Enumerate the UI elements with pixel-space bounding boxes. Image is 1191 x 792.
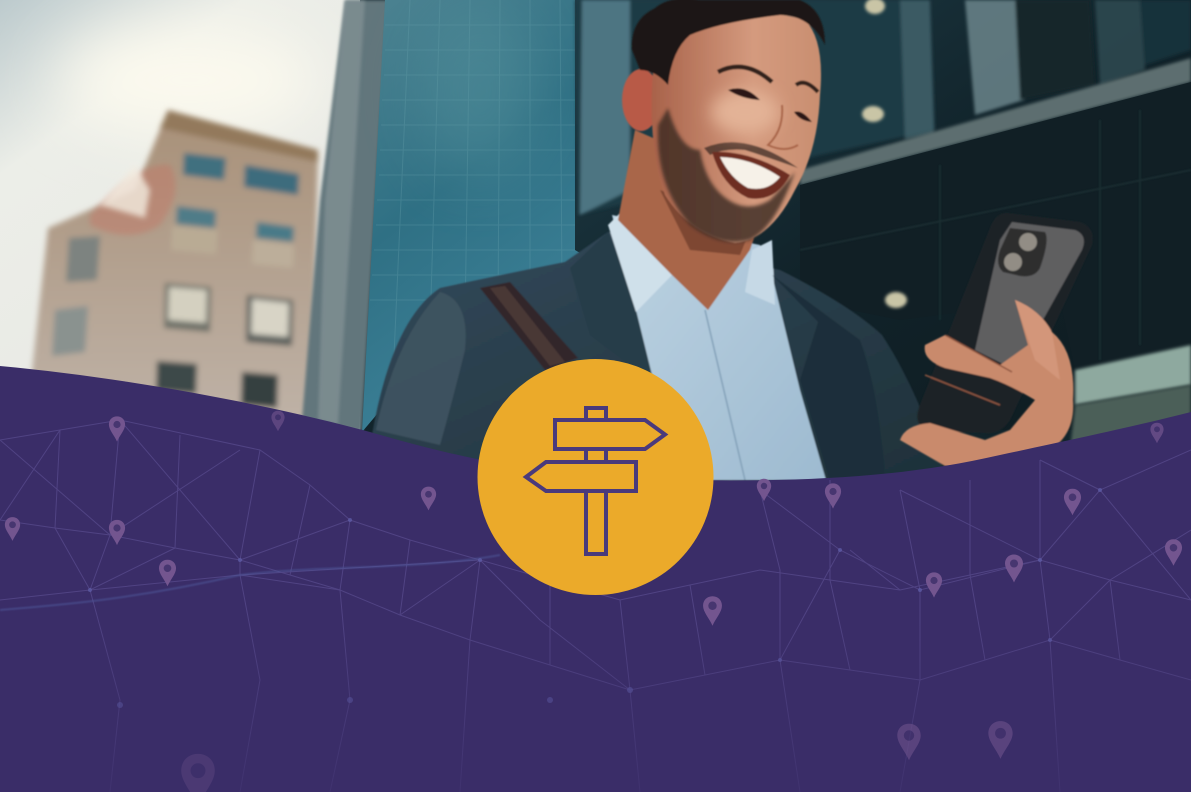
sun glow bbox=[60, 25, 320, 135]
brows bbox=[718, 67, 772, 82]
lower right ledge bbox=[1075, 345, 1191, 405]
smile bbox=[712, 152, 790, 199]
moustache bbox=[704, 142, 798, 168]
shirt bbox=[612, 215, 826, 480]
map pins bbox=[5, 411, 1182, 792]
beard stubble bbox=[658, 108, 795, 242]
hair bbox=[632, 0, 825, 85]
fade lower mesh bbox=[0, 610, 1191, 792]
mesh nodes bbox=[88, 418, 1102, 708]
left arrow sign bbox=[526, 462, 636, 491]
ear bbox=[622, 69, 660, 131]
purple wave panel with network map pattern bbox=[0, 366, 1191, 792]
lapels bbox=[571, 234, 616, 274]
post top bbox=[586, 408, 606, 420]
right lapel bbox=[772, 275, 885, 482]
background photo: businessman in city bbox=[0, 0, 1191, 500]
lights bbox=[862, 0, 907, 308]
dark tower with windows bbox=[575, 0, 1070, 430]
ceiling band bbox=[800, 58, 1191, 185]
nose bbox=[768, 105, 798, 149]
cheek highlight bbox=[711, 90, 779, 134]
right arrow sign bbox=[555, 420, 665, 449]
sky bbox=[0, 0, 360, 430]
bag strap bbox=[480, 282, 578, 370]
man bbox=[372, 0, 945, 495]
lens flare bbox=[90, 165, 176, 235]
head bbox=[652, 12, 821, 243]
blurred beige building bbox=[32, 110, 318, 430]
eyes bbox=[728, 88, 760, 100]
grey concrete pillar bbox=[302, 0, 388, 432]
glass tower bbox=[362, 0, 590, 432]
network mesh bbox=[0, 420, 1191, 792]
neck bbox=[618, 130, 770, 310]
phone and hand bbox=[900, 213, 1093, 467]
dark base behind photo bbox=[360, 0, 1074, 466]
icon: yellow circle with signpost bbox=[478, 359, 714, 595]
jacket bbox=[372, 232, 945, 495]
hand bbox=[900, 300, 1073, 467]
